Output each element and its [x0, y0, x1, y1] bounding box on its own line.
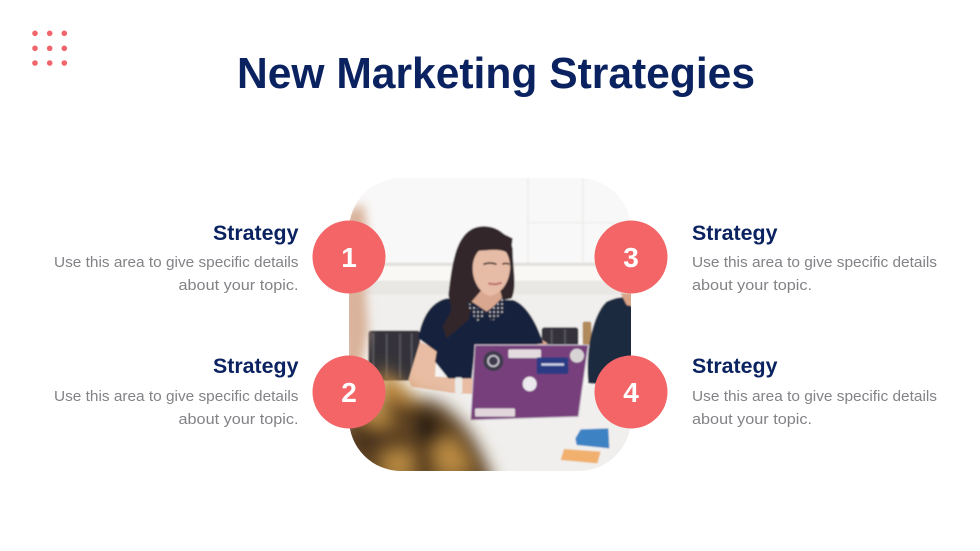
text block: strategy 1: about your topic.: [178, 277, 298, 294]
circle badge 2: 2: [341, 377, 357, 408]
circle badge 4: [594, 356, 668, 428]
polka dot collar: [466, 297, 504, 322]
text block: strategy 4: [692, 354, 937, 428]
text block: strategy 2: about your topic.: [178, 411, 298, 428]
text block: strategy 2: Use this area to give specific details: [54, 388, 298, 405]
neck: [472, 290, 503, 312]
circle badge 3: 3: [623, 242, 639, 273]
text block: strategy 1: [54, 221, 299, 294]
radiators: [368, 327, 578, 381]
title: New Marketing Strategies: [237, 49, 755, 98]
text block: strategy 4: about your topic.: [692, 411, 812, 428]
right person: [588, 297, 633, 387]
dress: [418, 298, 543, 378]
text block: strategy 3: about your topic.: [692, 277, 812, 294]
arms: [408, 342, 473, 394]
laptop: [471, 345, 588, 420]
circle badge 4: 4: [623, 377, 639, 408]
blurred person at left edge: [343, 203, 368, 377]
circle badge 2: [312, 356, 386, 428]
text block: strategy 4: Use this area to give specific details: [692, 388, 937, 405]
circle badge 1: 1: [341, 242, 357, 273]
watch: [455, 377, 462, 393]
text block: strategy 4: Strategy: [692, 354, 778, 378]
blurred foreground head: [350, 360, 504, 471]
table: [383, 385, 633, 473]
sticky notes: [575, 428, 609, 448]
text block: strategy 3: [692, 221, 937, 294]
text block: strategy 2: Strategy: [213, 354, 299, 378]
text block: strategy 1: Strategy: [213, 221, 299, 245]
text block: strategy 3: Use this area to give specific details: [692, 254, 937, 271]
text block: strategy 2: [54, 354, 299, 428]
text block: strategy 3: Strategy: [692, 221, 778, 245]
photo: woman with laptop at a table: [349, 178, 631, 471]
hair: [443, 226, 514, 338]
text block: strategy 1: Use this area to give specific details: [54, 254, 298, 271]
decorative dot grid icon: [32, 30, 67, 66]
circle badge 1: [312, 220, 386, 294]
face: [473, 245, 510, 296]
circle badge 3: [594, 220, 668, 294]
